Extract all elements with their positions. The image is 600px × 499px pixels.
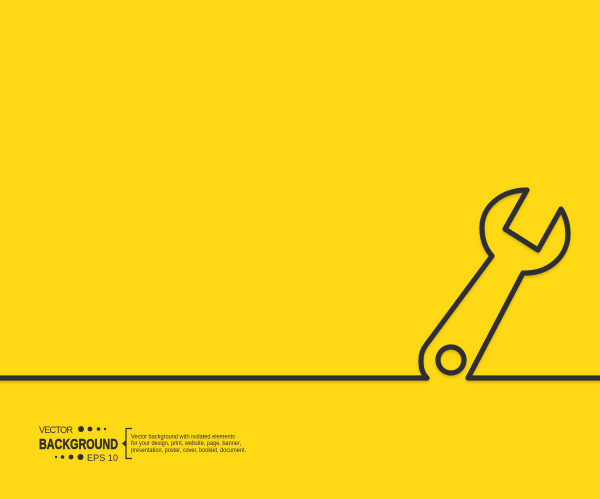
bracket	[122, 428, 132, 458]
logo text	[39, 425, 118, 463]
description text: for your design, print, website, page, banner,	[131, 440, 241, 447]
logo text: BACKGROUND	[39, 437, 118, 453]
description text: Vector background with isolated elements	[131, 434, 235, 440]
logo text: EPS 10	[87, 453, 118, 463]
logo dots	[55, 426, 106, 460]
wrench outline and ground line	[0, 190, 600, 378]
description text: presentation, poster, cover, booklet, document.	[131, 447, 246, 454]
logo text: VECTOR	[39, 425, 74, 435]
line shadow	[0, 192, 600, 380]
wrench hole	[438, 347, 464, 373]
description text	[131, 434, 246, 454]
icon: wrench on baseline	[0, 190, 600, 378]
